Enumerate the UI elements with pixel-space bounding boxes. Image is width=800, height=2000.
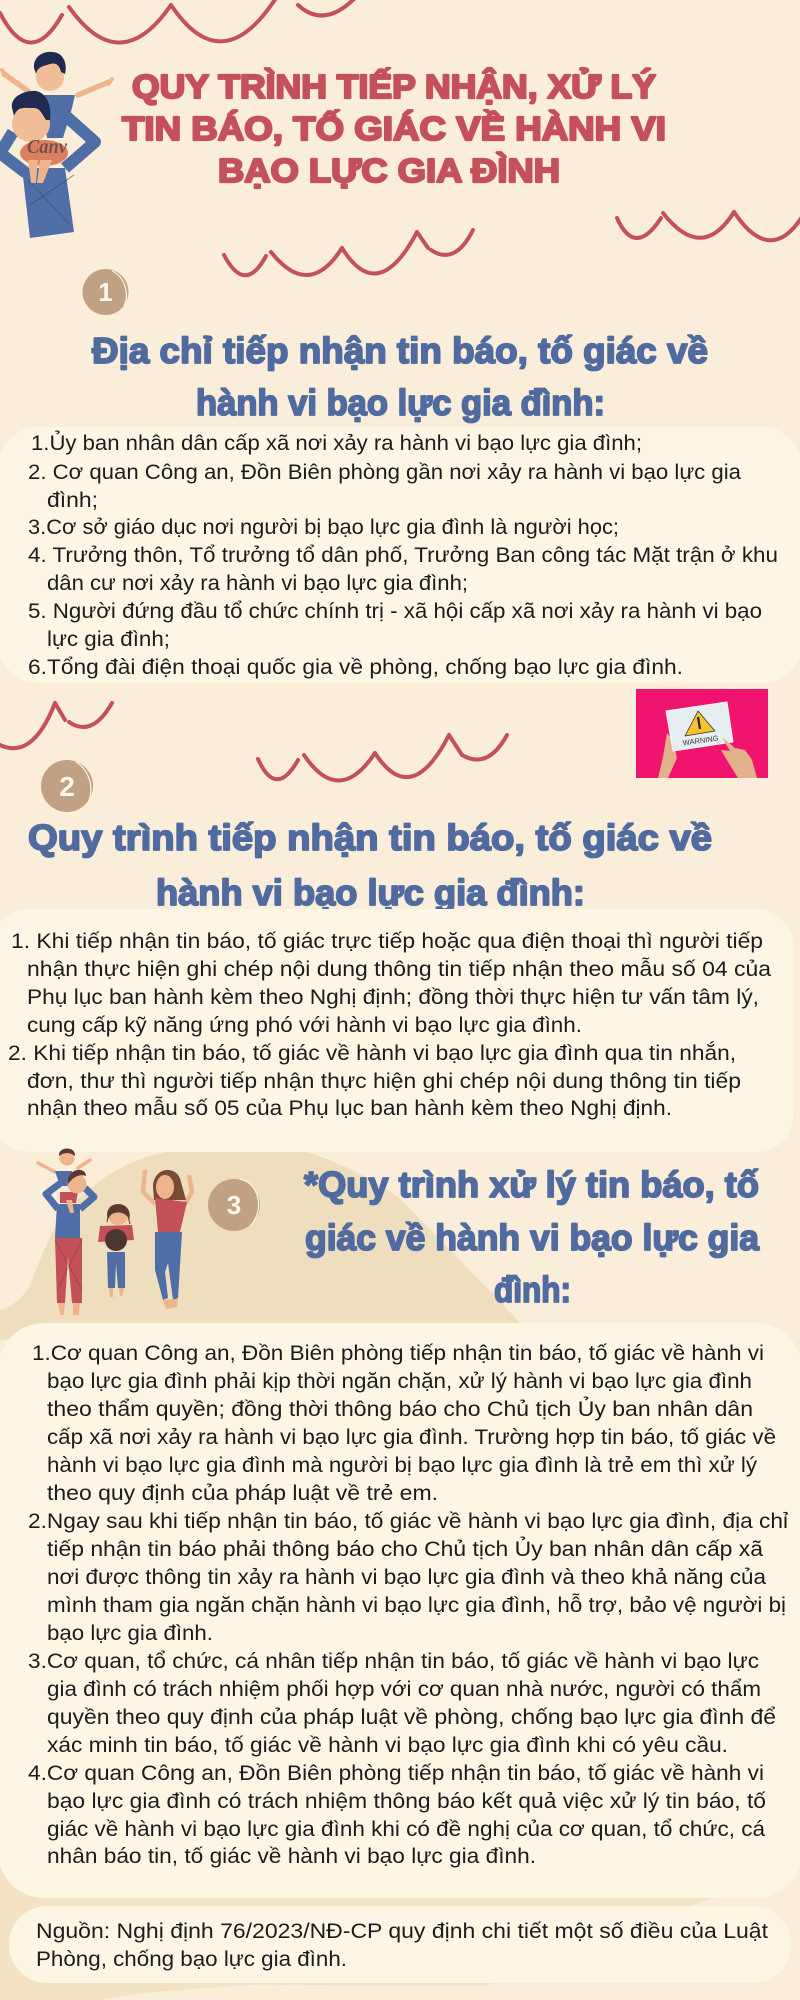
decorative wave: center upper	[224, 230, 473, 275]
illustration: father carrying child: Canv	[27, 136, 68, 158]
panel: addresses list: 2. Cơ quan Công an, Đồn Biên phòng gần nơi xảy ra hành vi bạo lực gia	[28, 460, 741, 484]
decorative wave: center middle	[258, 735, 507, 781]
illustration: family of four	[38, 1148, 192, 1315]
image: warning sign held on pink background	[636, 689, 768, 778]
panel: addresses list: 1.Ủy ban nhân dân cấp xã nơi xảy ra hành vi bạo lực gia đình;	[31, 430, 642, 455]
panel: addresses list: 3.Cơ sở giáo dục nơi người bị bạo lực gia đình là người học;	[28, 515, 619, 539]
panel: handling procedure: 1.Cơ quan Công an, Đồn Biên phòng tiếp nhận tin báo, tố giác về hành vi	[32, 1341, 764, 1365]
panel: receiving procedure: Phụ lục ban hành kèm theo Nghị định; đồng thời thực hiện tư vấn tâm lý,	[27, 985, 759, 1009]
panel: handling procedure: nhân báo tin, tố giác về hành vi bạo lực gia đình.	[47, 1844, 536, 1868]
panel: source note: Nguồn: Nghị định 76/2023/NĐ-CP quy định chi tiết một số điều của Luật	[36, 1919, 768, 1943]
panel: handling procedure: hành vi bạo lực gia đình mà người bị bạo lực gia đình là trẻ em thì xử lý	[47, 1453, 757, 1477]
heading: section 3: *Quy trình xử lý tin báo, tố	[304, 1164, 759, 1205]
number badge 3	[208, 1179, 260, 1231]
panel: handling procedure: theo quy định của pháp luật về trẻ em.	[47, 1481, 438, 1505]
panel: addresses list: lực gia đình;	[47, 627, 170, 651]
title	[122, 68, 666, 189]
panel: handling procedure: xác minh tin báo, tố giác về hành vi bạo lực gia đình khi có yêu cầu.	[47, 1733, 728, 1757]
panel: handling procedure	[0, 1323, 800, 1898]
panel: handling procedure: giác về hành vi bạo lực gia đình khi có đề nghị của cơ quan, tổ chức, cá	[47, 1817, 765, 1841]
background tone at page bottom	[0, 1860, 740, 2000]
panel: receiving procedure: 1. Khi tiếp nhận tin báo, tố giác trực tiếp hoặc qua điện thoại thì người tiếp	[11, 929, 763, 953]
panel: handling procedure: bạo lực gia đình.	[47, 1621, 213, 1645]
panel: receiving procedure: nhận theo mẫu số 05 của Phụ lục ban hành kèm theo Nghị định.	[27, 1095, 672, 1120]
panel: receiving procedure: cung cấp kỹ năng ứng phó với hành vi bạo lực gia đình.	[27, 1013, 582, 1037]
background hill behind section 3	[0, 1152, 520, 1340]
panel: addresses list	[0, 427, 800, 683]
title: BẠO LỰC GIA ĐÌNH	[218, 152, 560, 189]
panel: handling procedure: mình tham gia ngăn chặn hành vi bạo lực gia đình, hỗ trợ, bảo vệ người bị	[47, 1592, 786, 1617]
panel: addresses list: đình;	[47, 488, 98, 512]
panel: handling procedure: quyền theo quy định của pháp luật về phòng, chống bạo lực gia đình để	[47, 1705, 776, 1729]
heading: section 3: giác về hành vi bạo lực gia	[305, 1217, 760, 1258]
decorative wave: left middle	[0, 703, 112, 748]
heading: section 1	[92, 330, 708, 423]
panel: handling procedure: 2.Ngay sau khi tiếp nhận tin báo, tố giác về hành vi bạo lực gia đình, địa chỉ	[28, 1509, 788, 1533]
panel: receiving procedure: nhận thực hiện ghi chép nội dung thông tin tiếp nhận theo mẫu số 04 của	[27, 956, 771, 981]
title: TIN BÁO, TỐ GIÁC VỀ HÀNH VI	[122, 109, 666, 147]
number badge 1	[82, 269, 128, 315]
panel: handling procedure: gia đình có trách nhiệm phối hợp với cơ quan nhà nước, người có thẩm	[47, 1677, 761, 1701]
panel: addresses list: 6.Tổng đài điện thoại quốc gia về phòng, chống bạo lực gia đình.	[28, 655, 683, 679]
heading: section 3: đình:	[494, 1269, 571, 1310]
title: QUY TRÌNH TIẾP NHẬN, XỬ LÝ	[132, 68, 656, 105]
panel: handling procedure: bạo lực gia đình phải kịp thời ngăn chặn, xử lý hành vi bạo lực gia đình	[47, 1369, 752, 1393]
panel: receiving procedure	[0, 909, 793, 1152]
panel: addresses list: dân cư nơi xảy ra hành vi bạo lực gia đình;	[47, 571, 468, 595]
panel: source note	[9, 1906, 791, 1983]
illustration: father carrying child	[0, 52, 112, 238]
panel: handling procedure: nơi được thông tin xảy ra hành vi bạo lực gia đình và theo khả năng của	[47, 1565, 766, 1589]
number badge 2	[41, 760, 93, 812]
panel: handling procedure: tiếp nhận tin báo phải thông báo cho Chủ tịch Ủy ban nhân dân cấp xã	[47, 1536, 763, 1561]
panel: handling procedure: 3.Cơ quan, tổ chức, cá nhân tiếp nhận tin báo, tố giác về hành vi bạo lực	[28, 1649, 759, 1673]
heading: section 2: hành vi bạo lực gia đình:	[156, 872, 585, 913]
number badge 1: 1	[98, 277, 113, 307]
panel: handling procedure: bạo lực gia đình có trách nhiệm thông báo kết quả việc xử lý tin báo, tố	[47, 1789, 766, 1813]
heading: section 1: Địa chỉ tiếp nhận tin báo, tố giác về	[92, 330, 708, 371]
panel: receiving procedure: đơn, thư thì người tiếp nhận thực hiện ghi chép nội dung thông tin tiếp	[27, 1069, 741, 1093]
decorative wave: top	[0, 0, 355, 43]
panel: addresses list: 4. Trưởng thôn, Tổ trưởng tổ dân phố, Trưởng Ban công tác Mặt trận ở khu	[28, 543, 778, 567]
panel: addresses list: 5. Người đứng đầu tổ chức chính trị - xã hội cấp xã nơi xảy ra hành vi bạo	[28, 599, 762, 623]
panel: handling procedure: 4.Cơ quan Công an, Đồn Biên phòng tiếp nhận tin báo, tố giác về hành vi	[28, 1761, 764, 1785]
panel: handling procedure: theo thẩm quyền; đồng thời thông báo cho Chủ tịch Ủy ban nhân dân	[47, 1396, 753, 1421]
heading: section 2	[28, 817, 712, 913]
heading: section 3	[304, 1164, 760, 1310]
heading: section 1: hành vi bạo lực gia đình:	[196, 382, 605, 423]
panel: receiving procedure: 2. Khi tiếp nhận tin báo, tố giác về hành vi bạo lực gia đình qua tin nhắn,	[8, 1040, 736, 1065]
heading: section 2: Quy trình tiếp nhận tin báo, tố giác về	[28, 817, 712, 858]
image: warning sign held on pink background: WARNING	[682, 734, 719, 747]
panel: source note: Phòng, chống bạo lực gia đình.	[36, 1947, 347, 1971]
number badge 2: 2	[59, 771, 75, 802]
number badge 3: 3	[227, 1190, 241, 1220]
decorative wave: right	[617, 212, 800, 240]
panel: handling procedure: cấp xã nơi xảy ra hành vi bạo lực gia đình. Trường hợp tin báo, tố giác về	[47, 1425, 776, 1449]
